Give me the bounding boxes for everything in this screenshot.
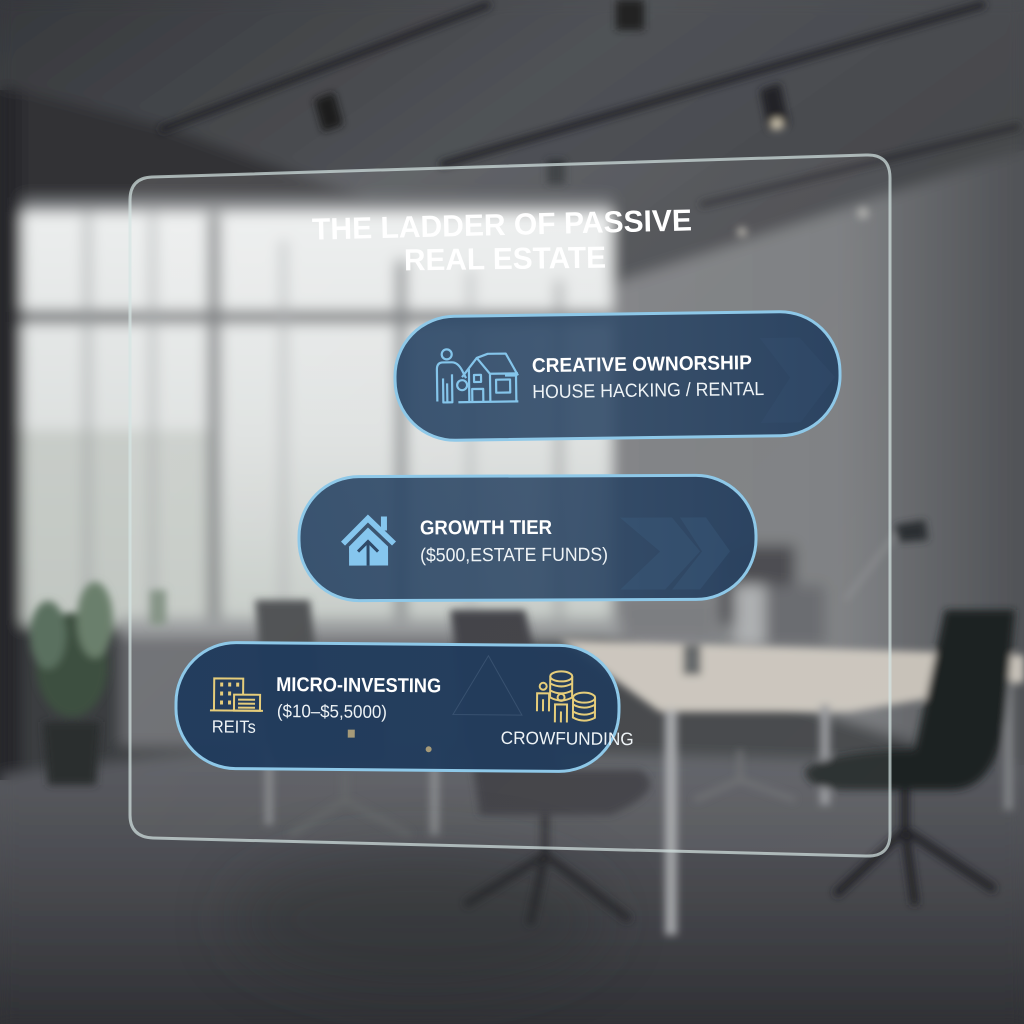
monitor area — [720, 545, 795, 625]
icon: house with up arrow — [341, 514, 396, 566]
label: crowdfunding: CROWFUNDING — [501, 728, 634, 749]
left wall — [0, 90, 22, 790]
title: REAL ESTATE — [404, 241, 606, 277]
tier subtitle: HOUSE HACKING / RENTAL — [532, 379, 764, 403]
chairs — [805, 610, 1015, 790]
icon: person with house and key — [437, 348, 518, 403]
window — [22, 205, 612, 625]
tier card: creative ownership — [394, 311, 841, 441]
title: THE LADDER OF PASSIVE — [312, 203, 692, 247]
decorative chevrons — [620, 517, 730, 590]
decorative chevrons — [759, 337, 836, 423]
floor — [0, 745, 1024, 1024]
track lights — [314, 92, 343, 132]
gold dots — [348, 730, 355, 738]
tier subtitle: ($10–$5,5000) — [277, 701, 387, 722]
glass panel — [130, 155, 890, 856]
tier card: micro-investing — [175, 642, 635, 772]
tier heading: CREATIVE OWNORSHIP — [532, 352, 752, 377]
icon: REIT building — [210, 678, 263, 711]
counter — [120, 618, 620, 638]
plant — [43, 722, 100, 785]
icon: crowdfunding people and coins — [537, 671, 595, 723]
title — [312, 203, 692, 277]
tier subtitle: ($500,ESTATE FUNDS) — [420, 545, 608, 566]
decorative triangle — [453, 655, 522, 715]
desk lamp and mug — [895, 520, 928, 542]
back and right wall — [610, 150, 1024, 780]
tier heading: GROWTH TIER — [420, 517, 553, 539]
table — [560, 640, 1024, 712]
label: REITs: REITs — [212, 716, 256, 737]
floor reflection — [230, 850, 610, 990]
tier heading: MICRO-INVESTING — [276, 674, 441, 697]
tier card: growth tier — [299, 475, 756, 601]
ceiling — [0, 0, 1024, 285]
ceiling rails — [160, 4, 490, 130]
